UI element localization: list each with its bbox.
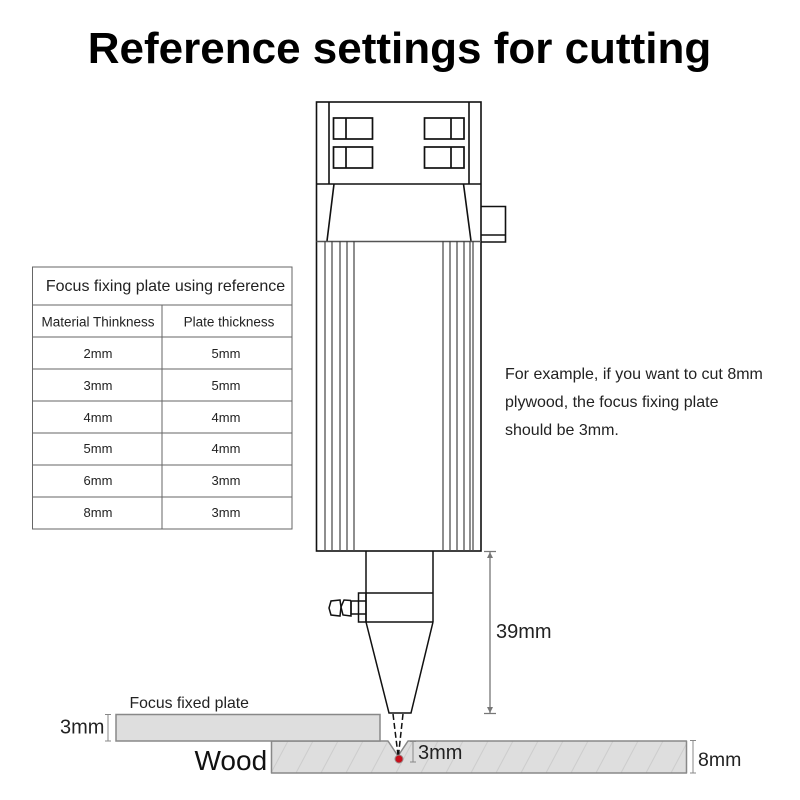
vents [334, 118, 464, 168]
laser module body [316, 102, 506, 551]
example note: plywood, the focus fixing plate [505, 394, 719, 411]
table: 8mm [84, 505, 112, 520]
title: Reference settings for cutting [88, 24, 711, 73]
table: 5mm [212, 378, 240, 393]
table: Material Thinkness [41, 314, 155, 330]
table: 2mm [84, 346, 112, 361]
laser beam [393, 714, 403, 755]
table: 4mm [84, 410, 112, 425]
nozzle [329, 551, 433, 713]
dimension: wood 8mm [690, 740, 741, 773]
table: 6mm [84, 473, 112, 488]
table: 3mm [212, 505, 240, 520]
dimension: wood 8mm: 8mm [698, 749, 741, 771]
dimension: depth 3mm: 3mm [418, 742, 462, 764]
wood label: Wood [194, 745, 267, 776]
wood [272, 741, 686, 773]
dimension: 39mm: 39mm [496, 621, 552, 643]
table: 4mm [212, 410, 240, 425]
table: 3mm [84, 378, 112, 393]
table: 5mm [84, 441, 112, 456]
table [32, 267, 292, 529]
plate label: Focus fixed plate [130, 695, 249, 712]
table: Plate thickness [184, 314, 275, 330]
focus plate [116, 714, 380, 741]
example note: For example, if you want to cut 8mm [505, 366, 763, 383]
dimension: 39mm [484, 552, 552, 714]
table: Focus fixing plate using reference [46, 278, 285, 295]
example note: should be 3mm. [505, 422, 619, 439]
dimension: plate 3mm: 3mm [60, 716, 104, 738]
table: 4mm [212, 441, 240, 456]
example note [505, 366, 763, 439]
table: 3mm [212, 473, 240, 488]
table: 5mm [212, 346, 240, 361]
focus point [395, 755, 403, 763]
air fitting [351, 601, 358, 614]
